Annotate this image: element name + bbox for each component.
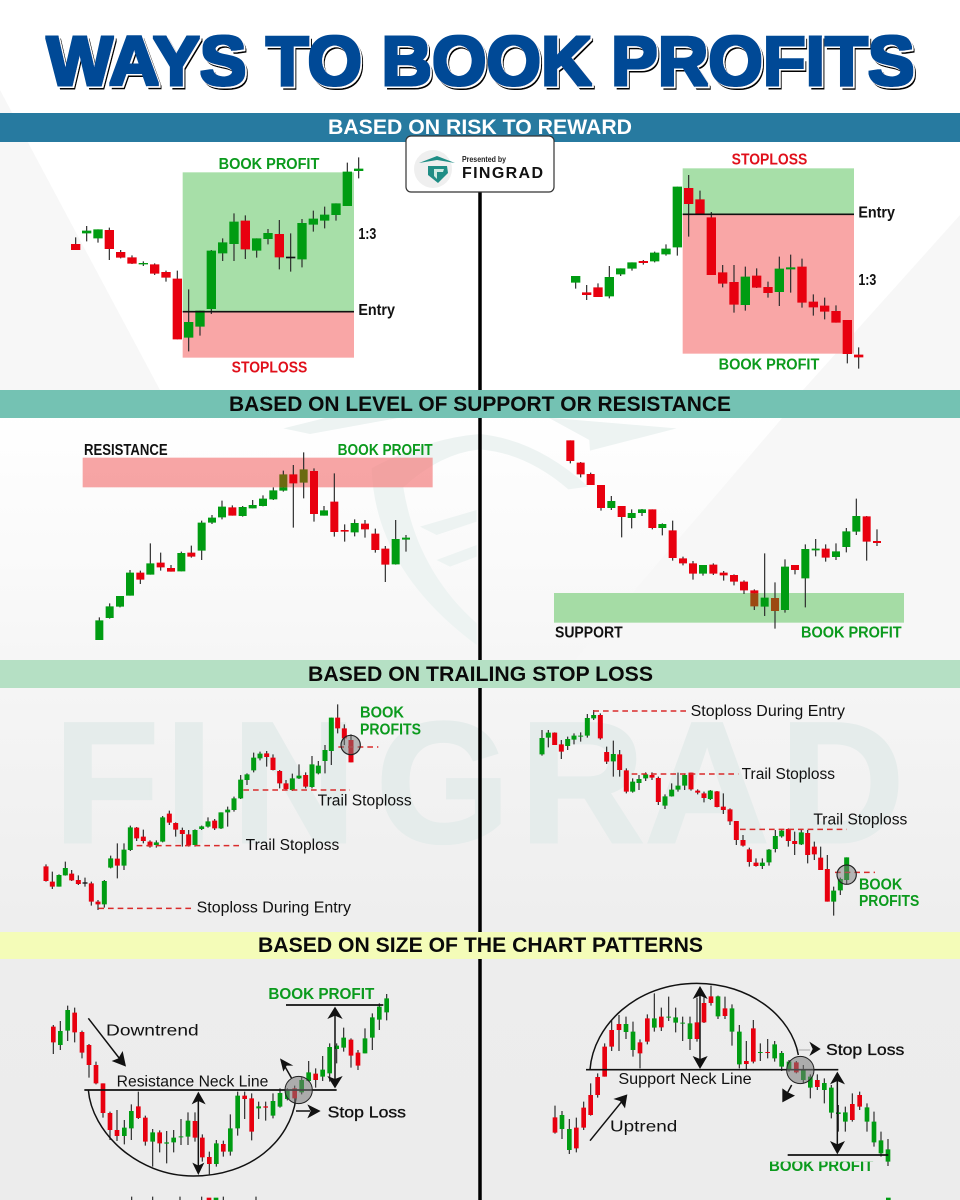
label: entry: Entry: [858, 205, 895, 222]
label: stop loss: Stop Loss: [328, 1105, 406, 1122]
arrows: [590, 986, 845, 1154]
rounded bottom curve: [88, 1090, 296, 1176]
label: book profits: PROFITS: [859, 893, 919, 910]
clipped candle stubs at page bottom: [132, 1197, 256, 1200]
logo badge: FINGRAD: [462, 165, 543, 182]
chart: trailing stop short: [542, 703, 919, 916]
label: book profits: [360, 705, 421, 738]
entry line: [183, 309, 354, 314]
title: WAYS TO BOOK PROFITS: [47, 22, 915, 100]
label: ratio: 1:3: [858, 272, 876, 289]
background facets: [0, 90, 960, 660]
watermark: shield logo: [283, 418, 677, 645]
rounded top curve: [590, 983, 798, 1070]
label: resistance: RESISTANCE: [84, 442, 168, 459]
label: stoploss during entry: Stoploss During Entry: [197, 899, 351, 916]
chart: short risk to reward: [576, 152, 895, 373]
entry line: [683, 212, 854, 217]
resistance band: [83, 458, 433, 487]
candlesticks: [555, 986, 888, 1166]
candlesticks: [570, 440, 877, 629]
label: trail stoploss lower: Trail Stoploss: [813, 811, 908, 828]
candlesticks: [46, 704, 351, 910]
section heading: trailing stop loss: [0, 660, 960, 688]
label: stoploss: STOPLOSS: [232, 359, 307, 376]
label: trail stoploss lower: Trail Stoploss: [246, 837, 340, 854]
candlesticks: [53, 994, 387, 1174]
label: book profits: [859, 876, 919, 910]
section heading: risk to reward: BASED ON RISK TO REWARD: [328, 116, 632, 139]
label: trail stoploss upper: Trail Stoploss: [742, 766, 835, 783]
stoploss zone: [683, 168, 854, 214]
exit marker: [837, 865, 856, 884]
candlesticks: [576, 175, 859, 369]
label: book profits: BOOK: [360, 705, 404, 722]
logo badge: Presented by: [462, 155, 506, 164]
label: support neck line: Support Neck Line: [618, 1071, 752, 1088]
section heading: chart patterns: [0, 932, 960, 959]
clipped candle stub at page bottom: [881, 1198, 895, 1200]
label: stoploss: STOPLOSS: [732, 152, 807, 169]
label: downtrend: Downtrend: [106, 1023, 199, 1040]
profit zone: [183, 172, 354, 312]
arrows: [88, 1007, 343, 1175]
chart: support: [554, 440, 904, 641]
section heading: support or resistance: [0, 390, 960, 418]
dashed stop lines: [98, 747, 378, 908]
label: support: SUPPORT: [555, 624, 623, 641]
label: book profits: BOOK: [859, 876, 902, 893]
label: resistance neck line: Resistance Neck Line: [117, 1074, 268, 1091]
profit zone: [683, 214, 854, 354]
label: trail stoploss upper: Trail Stoploss: [318, 793, 412, 810]
label: book profit: BOOK PROFIT: [268, 986, 375, 1003]
support band: [554, 593, 904, 623]
breakout marker: [285, 1076, 312, 1104]
target line: [788, 1152, 888, 1157]
chart: trailing stop long: [46, 704, 421, 916]
candlesticks: [542, 710, 847, 916]
stoploss zone: [183, 312, 354, 358]
label: entry: Entry: [358, 302, 395, 319]
watermark: FINGRAD: FINGRAD: [54, 687, 904, 879]
neck line: [586, 1067, 838, 1072]
candlesticks: [99, 452, 406, 640]
target line: [286, 1002, 383, 1007]
label: uptrend: Uptrend: [610, 1119, 677, 1136]
label: stoploss during entry: Stoploss During Entry: [691, 703, 845, 720]
exit marker: [341, 735, 360, 755]
chart: long risk to reward: [76, 156, 395, 376]
dashed stop lines: [593, 711, 875, 872]
label: book profit (partly clipped): BOOK PROFIT: [769, 1158, 874, 1175]
label: book profits: PROFITS: [360, 721, 421, 738]
chart: rounding top: [555, 983, 905, 1200]
section heading: risk to reward: [0, 113, 960, 142]
label: book profit: BOOK PROFIT: [719, 356, 820, 373]
label: book profit: BOOK PROFIT: [801, 624, 902, 641]
label: stop loss: Stop Loss: [826, 1042, 905, 1059]
section heading: support or resistance: BASED ON LEVEL OF SUPPORT OR RESISTANCE: [229, 393, 731, 416]
breakdown marker: [787, 1056, 814, 1084]
chart: rounding bottom: [53, 986, 406, 1200]
section heading: trailing stop loss: BASED ON TRAILING STOP LOSS: [308, 663, 653, 686]
section heading: chart patterns: BASED ON SIZE OF THE CHART PATTERNS: [258, 934, 703, 957]
candlesticks: [76, 157, 359, 351]
logo badge: [406, 136, 554, 192]
chart: resistance: [83, 442, 433, 640]
label: book profit: BOOK PROFIT: [338, 442, 433, 459]
label: book profit: BOOK PROFIT: [219, 156, 320, 173]
label: ratio: 1:3: [358, 226, 376, 243]
neck line: [84, 1087, 337, 1092]
center divider: [478, 190, 482, 1200]
